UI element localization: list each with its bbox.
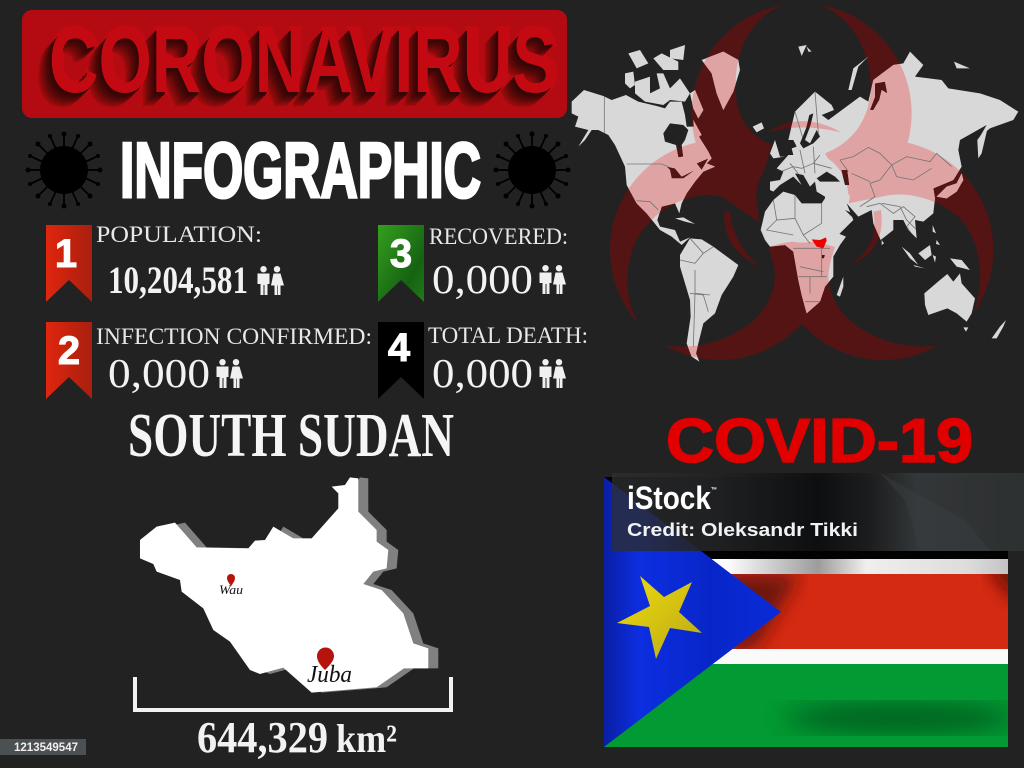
value infection confirmed: 0,000 — [108, 350, 210, 396]
South Sudan highlighted — [812, 237, 827, 248]
stock id tag: 1213549547 — [14, 740, 78, 754]
icon: people — [258, 266, 284, 295]
value total death: 0,000 — [432, 350, 533, 396]
green stripe — [604, 664, 1008, 747]
stat 1: population — [46, 222, 284, 302]
number 2: 2 — [58, 329, 80, 373]
number 1: 1 — [55, 232, 77, 276]
number 3: 3 — [390, 232, 412, 276]
icon: people — [216, 359, 243, 388]
icon: people — [540, 265, 566, 294]
lower white stripe — [604, 649, 1008, 664]
biohazard overlay on land and borders — [604, 52, 964, 358]
stat 2: infection confirmed — [46, 322, 372, 399]
ribbon 4 — [378, 322, 424, 399]
ribbon 3 — [378, 225, 424, 302]
area value: 644,329 — [197, 713, 328, 762]
number 4: 4 — [388, 326, 411, 370]
ribbon 1 — [46, 225, 92, 302]
label population: POPULATION: — [96, 222, 262, 247]
label: Juba: Juba — [307, 662, 352, 688]
label recovered: RECOVERED: — [429, 224, 568, 249]
map extrusion shadow — [150, 477, 438, 693]
red stripe — [604, 574, 1008, 649]
iStock logo text: ™ — [711, 487, 717, 494]
label infection confirmed: INFECTION CONFIRMED: — [96, 324, 372, 349]
stock id tag — [0, 739, 86, 755]
credit text: Credit: Oleksandr Tikki — [627, 520, 858, 540]
heading: infographic: INFOGRAPHIC — [120, 126, 481, 214]
ribbon 2 — [46, 322, 92, 399]
South Sudan flag — [604, 477, 1020, 747]
title banner: CORONAVIRUS — [49, 10, 558, 112]
virus icon right — [494, 132, 570, 208]
world map continents — [572, 45, 1018, 362]
value population: 10,204,581 — [108, 259, 248, 302]
stat 4: total death — [378, 322, 588, 399]
scale bracket — [135, 677, 451, 710]
watermark decorative shapes — [880, 473, 990, 551]
area value: km² — [336, 716, 397, 761]
country map of South Sudan — [140, 477, 438, 693]
stat 3: recovered — [378, 224, 568, 302]
label: Wau: Wau — [219, 582, 244, 597]
yellow star — [617, 576, 702, 659]
iStock logo text: iStock — [627, 480, 723, 516]
pin: Wau — [227, 574, 235, 586]
world map with biohazard symbol — [572, 5, 1018, 362]
value recovered: 0,000 — [432, 256, 533, 302]
virus icon left — [26, 132, 102, 208]
green fold shadow — [785, 703, 1015, 733]
upper white stripe — [604, 559, 1008, 574]
watermark panel — [612, 473, 1024, 551]
pin: Juba — [317, 648, 334, 670]
icon: people — [540, 359, 566, 388]
label total death: TOTAL DEATH: — [428, 323, 588, 348]
heading: country name: SOUTH SUDAN — [128, 402, 454, 470]
heading: covid-19: COVID-19 — [666, 407, 973, 476]
blue triangle — [604, 477, 781, 747]
red fold shading — [732, 574, 1008, 649]
map face — [140, 477, 428, 693]
biohazard symbol — [565, 0, 1024, 390]
black stripe — [604, 477, 1008, 559]
